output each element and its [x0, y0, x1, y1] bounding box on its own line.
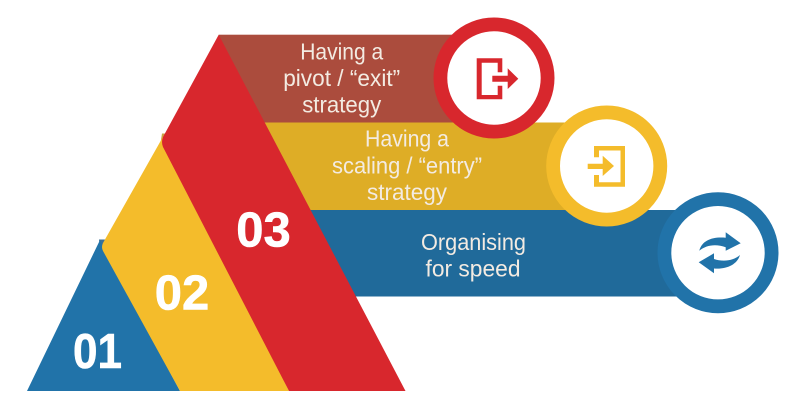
circle: entry icon	[553, 112, 660, 220]
band 3 text: Organising	[421, 229, 526, 255]
icon: entry door	[588, 146, 625, 187]
band 3 text: for speed	[426, 256, 520, 282]
band 1: pivot strategy	[219, 35, 494, 123]
number 03: 03	[236, 204, 291, 258]
yellow segment 02	[102, 134, 289, 391]
circle: organising icon	[664, 199, 772, 306]
number 01: 01	[73, 325, 122, 379]
band 2 text: strategy	[367, 179, 447, 205]
band 3: organising for speed	[300, 210, 720, 296]
icon: exit door	[477, 58, 518, 99]
band 1 text: strategy	[302, 92, 382, 118]
band 2 text: scaling / “entry”	[332, 152, 482, 178]
red segment 03	[162, 35, 406, 391]
band 1 text: Having a	[300, 38, 383, 64]
band 2: scaling strategy	[215, 122, 607, 210]
blue triangle segment 01	[27, 240, 180, 391]
number 02: 02	[155, 266, 209, 320]
band 1 text: pivot / “exit”	[283, 65, 400, 91]
icon: refresh arrows	[699, 232, 741, 273]
circle: exit icon	[440, 24, 548, 132]
band 2 text: Having a	[365, 126, 449, 152]
